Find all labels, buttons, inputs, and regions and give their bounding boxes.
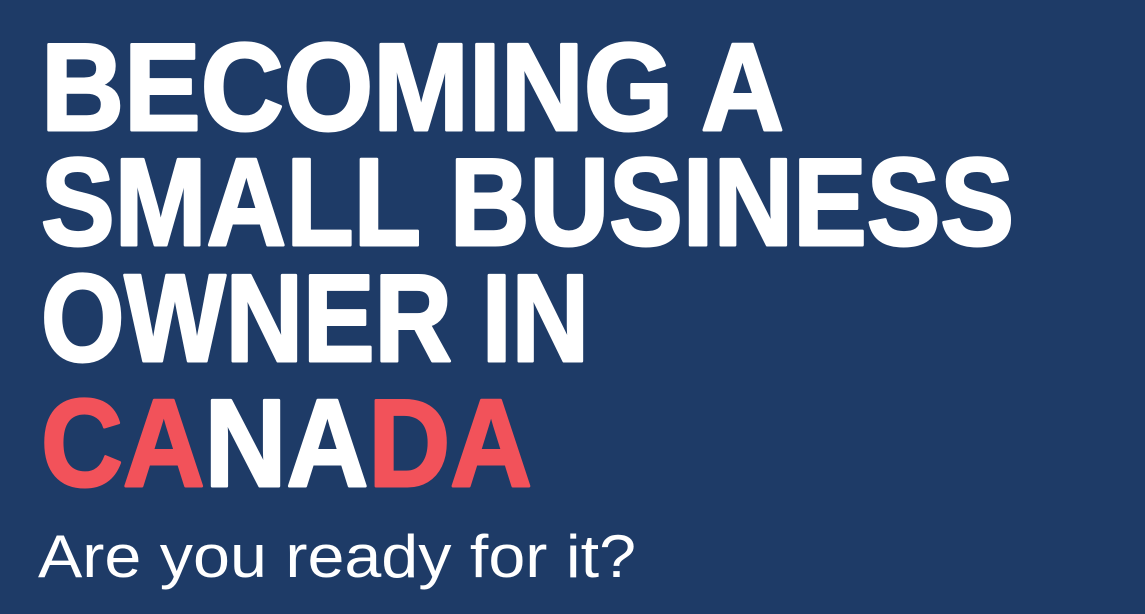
title line 2: SMALL BUSINESS xyxy=(41,134,1014,272)
title xyxy=(41,19,1014,513)
title line 1: BECOMING A xyxy=(41,19,784,157)
subtitle: Are you ready for it? xyxy=(38,523,636,590)
title line 4: CANADA: CANADA xyxy=(41,375,532,513)
title line 3: OWNER IN xyxy=(41,250,589,388)
